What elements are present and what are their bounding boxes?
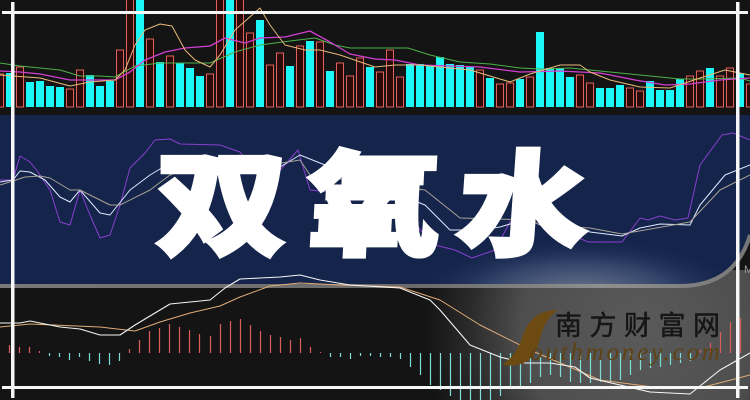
gold swoosh icon (502, 310, 558, 366)
orange DEA line (0, 283, 750, 388)
red histogram bars (10, 318, 740, 353)
white DIF line (0, 275, 750, 394)
purple J line (0, 133, 750, 258)
watermark logo (502, 304, 728, 366)
teal histogram bars (50, 353, 690, 400)
character 水: 水 (453, 115, 596, 279)
green average line (0, 38, 750, 81)
watermark domain: outhmoney.com (530, 339, 723, 366)
moving average lines (0, 8, 750, 88)
title: 双氧水 (156, 114, 596, 279)
gray glow behind watermark (420, 270, 750, 400)
cyan volume bars (6, 0, 744, 107)
orange average line (0, 8, 750, 88)
white K line (0, 155, 750, 236)
KDJ indicator lines (0, 133, 750, 258)
band bottom glow (0, 115, 750, 286)
navy title band (0, 115, 750, 286)
MACD histogram (10, 318, 740, 400)
gray D line (0, 160, 750, 234)
red volume bars (0, 0, 750, 107)
MACD lines (0, 275, 750, 394)
magenta average line (0, 31, 750, 85)
character 氧: 氧 (303, 114, 446, 279)
character 双: 双 (156, 114, 287, 279)
watermark Chinese name: 南方财富网 (555, 304, 728, 343)
volume bar chart (0, 0, 750, 107)
band lower edge (0, 235, 750, 286)
